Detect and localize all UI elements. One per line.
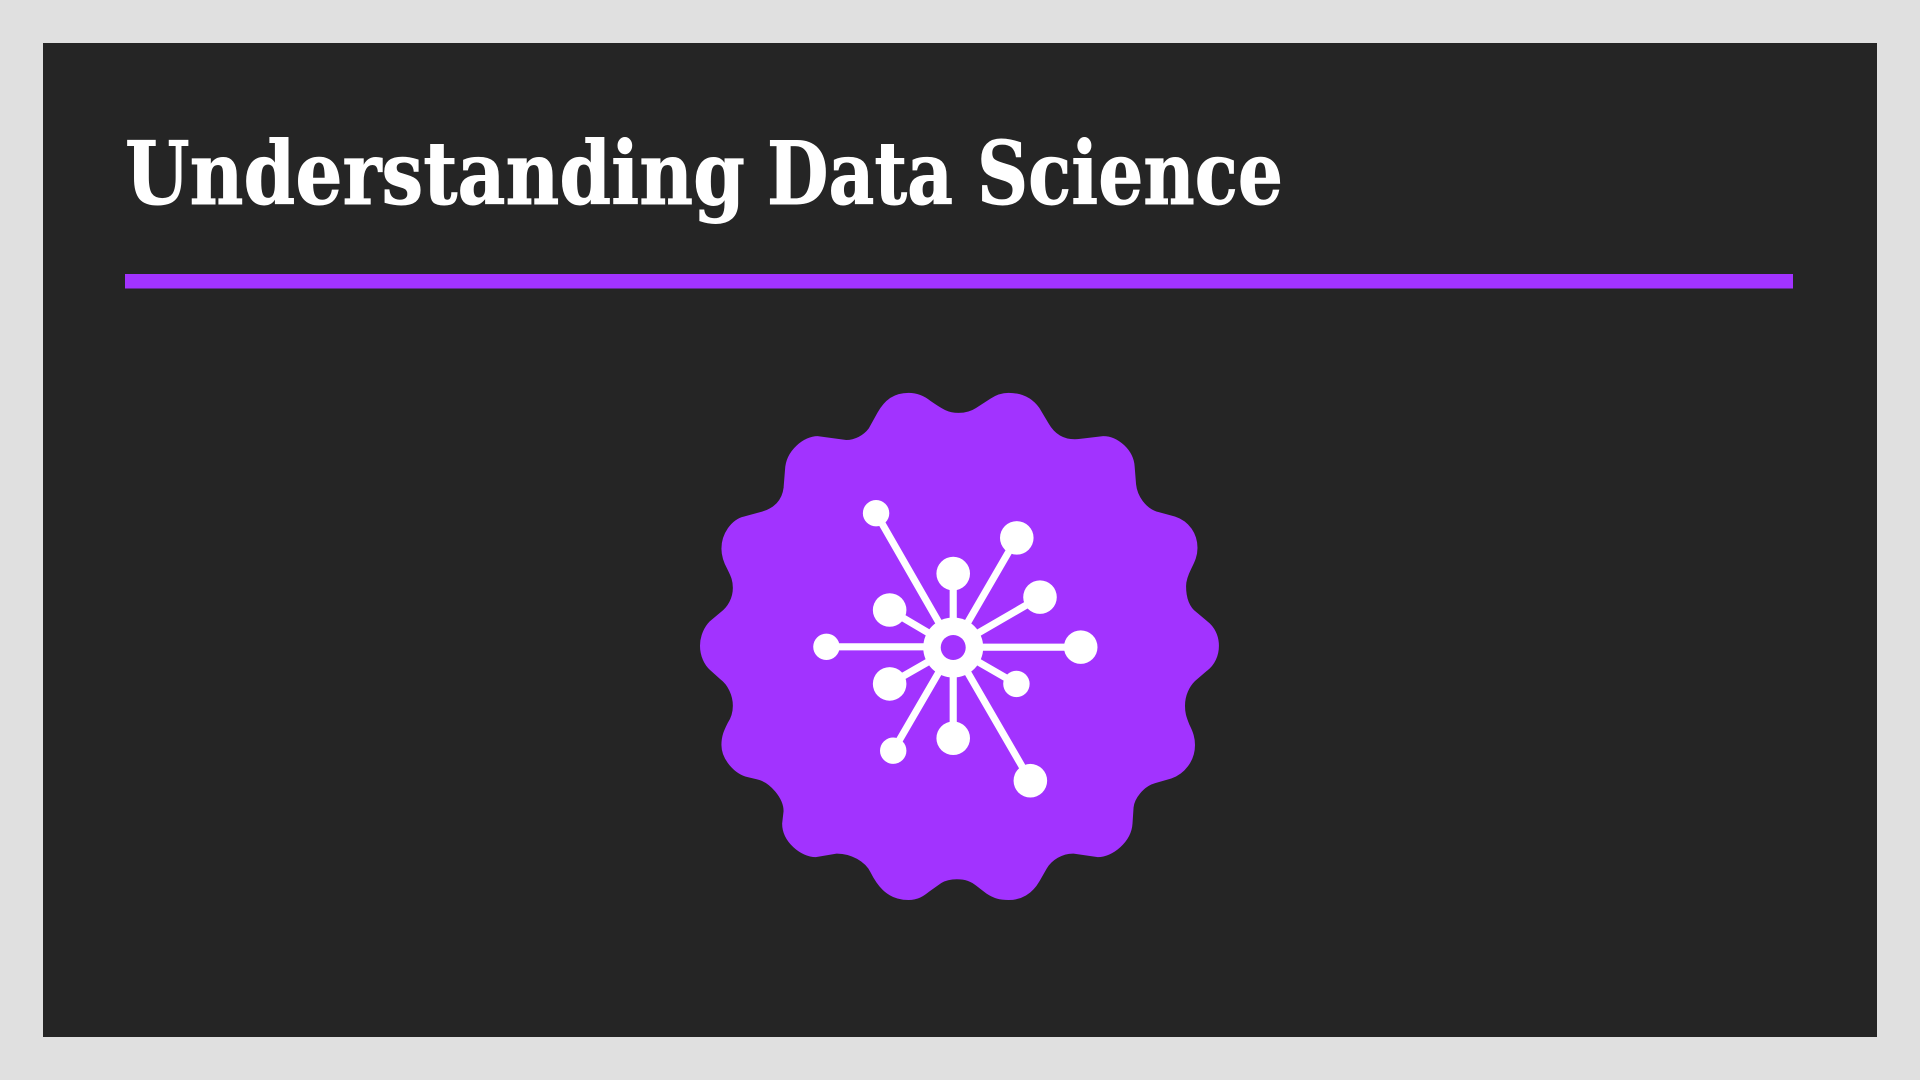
title: Data	[767, 122, 953, 225]
badge with network icon	[701, 394, 1218, 899]
icon: data network hub and spokes	[813, 500, 1097, 797]
title: Understanding	[125, 122, 745, 225]
heading underline bar	[125, 274, 1793, 288]
badge: purple scalloped shape	[701, 394, 1218, 899]
title: Science	[977, 122, 1283, 225]
